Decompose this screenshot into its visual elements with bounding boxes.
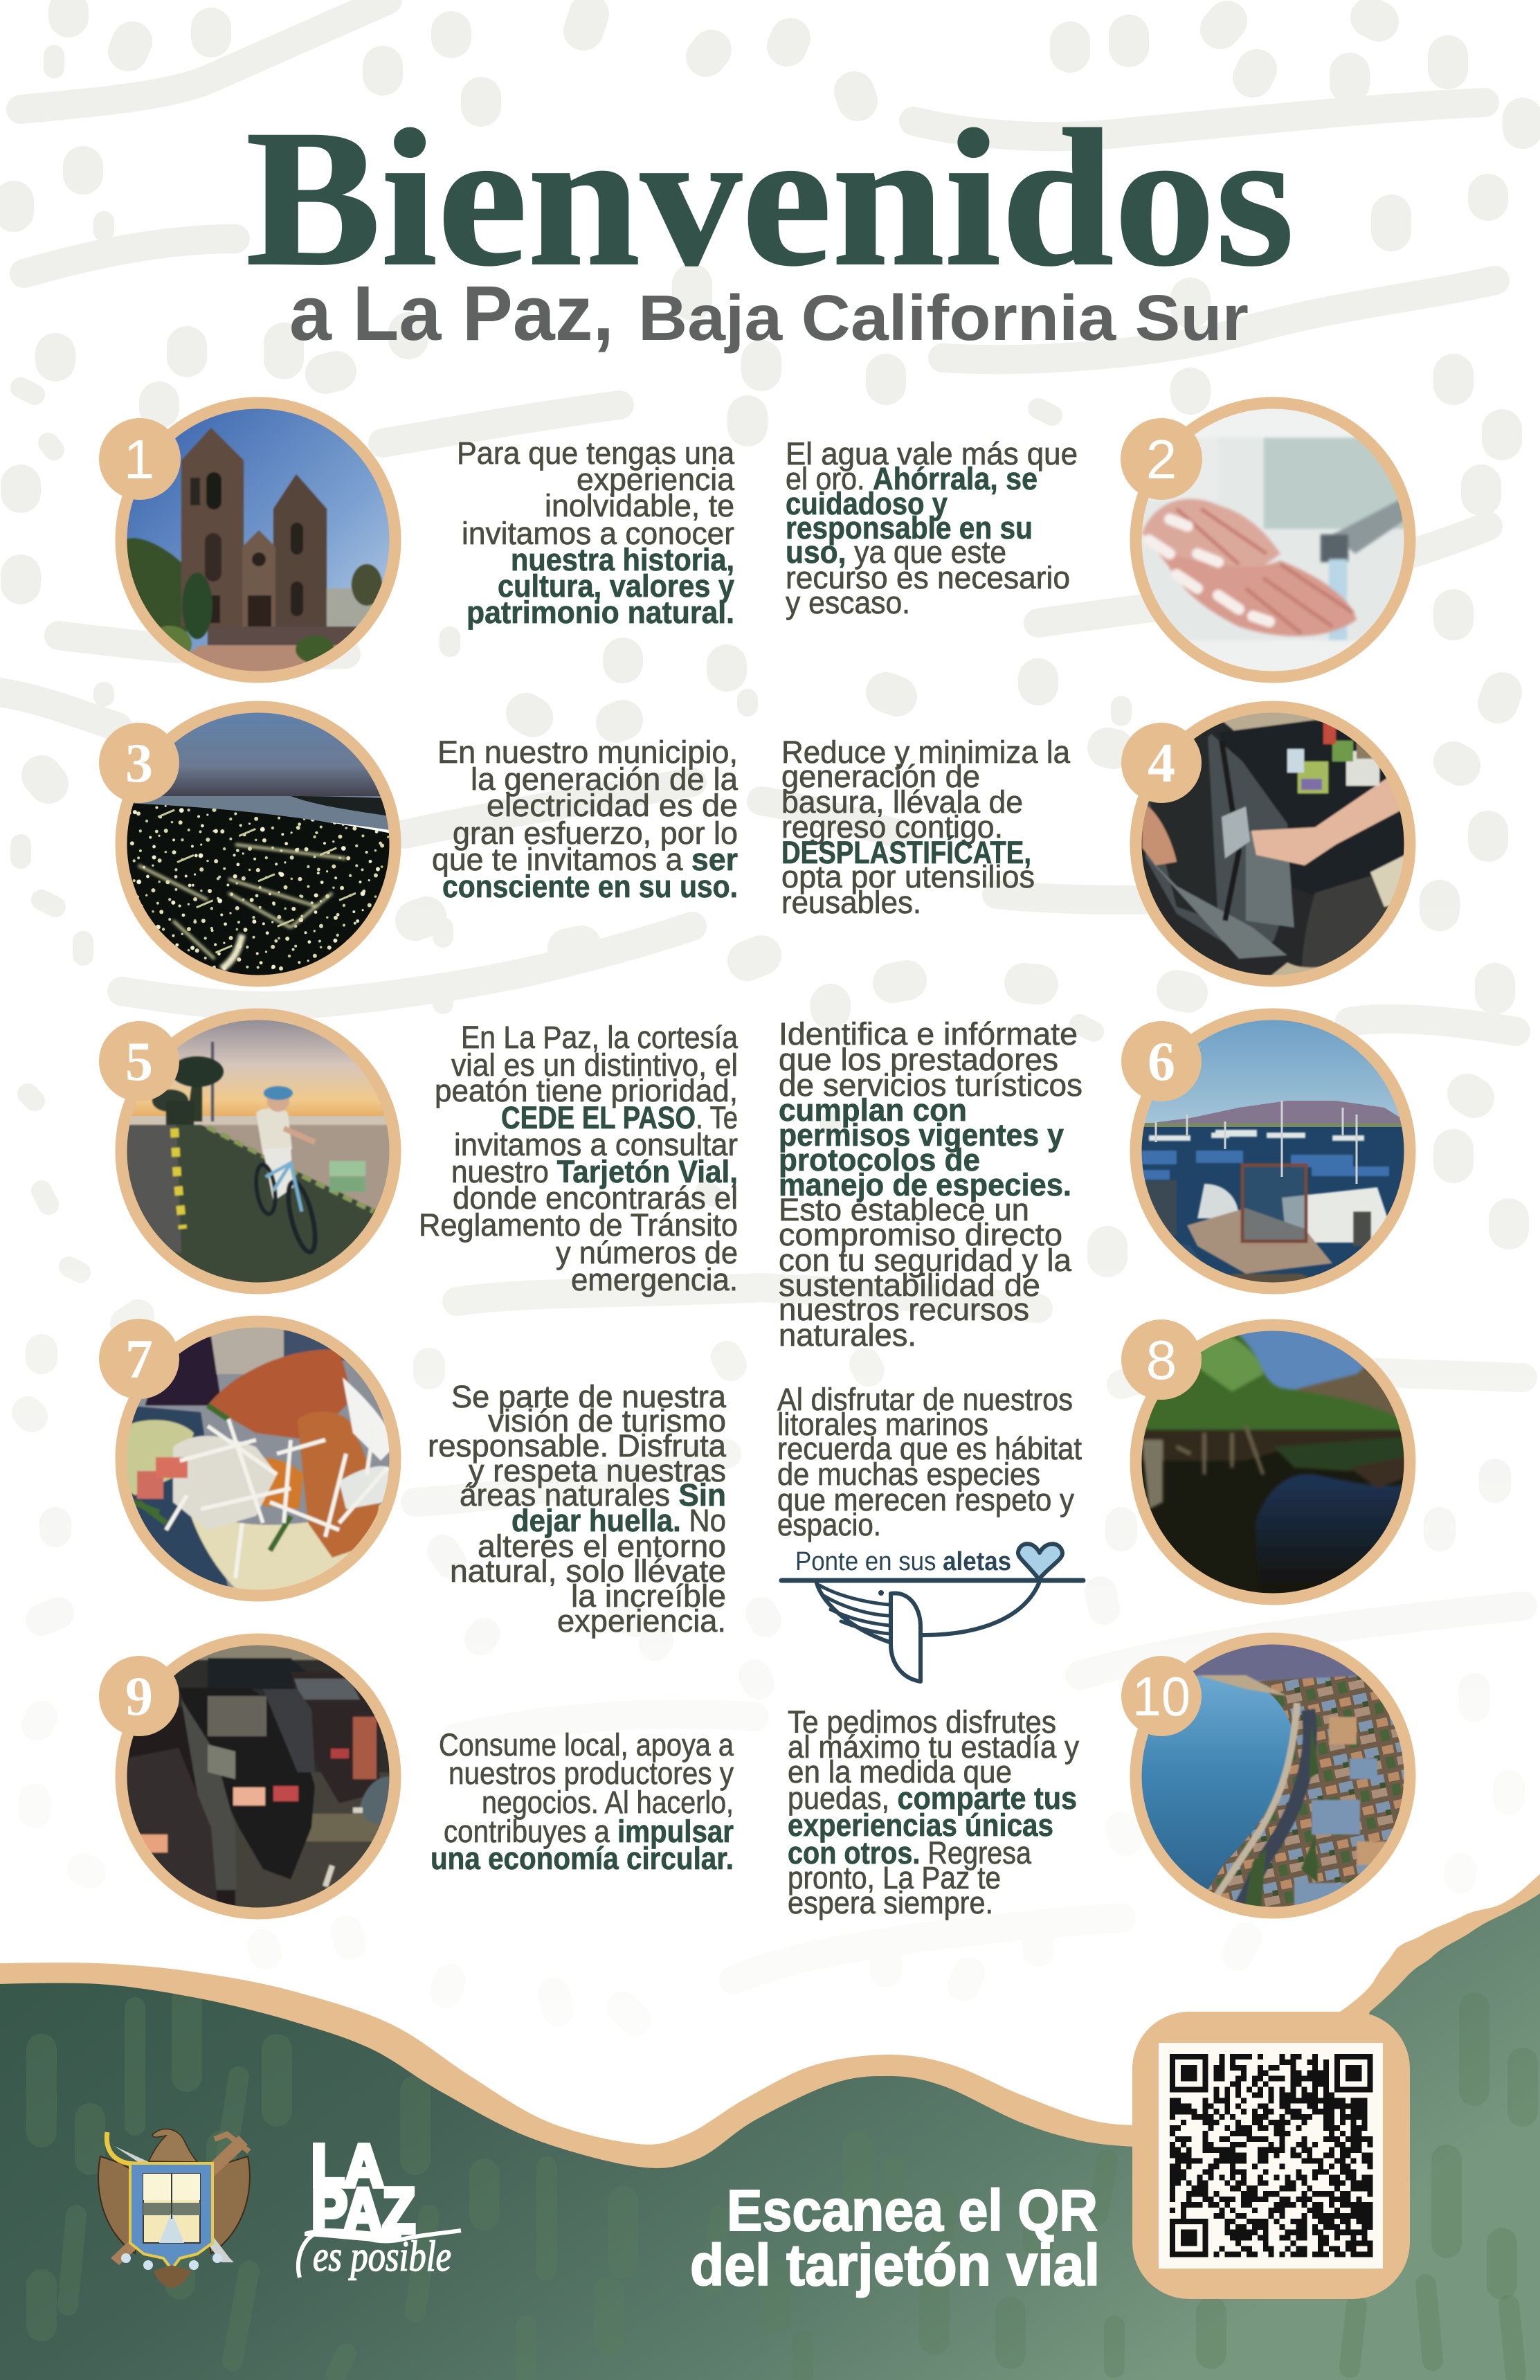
text block 2: recurso es necesario xyxy=(786,560,1070,595)
text block 8: Al disfrutar de nuestros xyxy=(777,1382,1073,1417)
text block 6: Identifica e infórmate xyxy=(779,1016,1078,1052)
text block 1 xyxy=(457,435,735,630)
badge 7: 7 xyxy=(125,1329,153,1390)
ring 5 xyxy=(121,1014,395,1288)
text block 9: una economía circular. xyxy=(431,1841,734,1876)
text block 6: manejo de especies. xyxy=(779,1167,1071,1202)
badge 3 xyxy=(99,723,179,803)
text block 1: cultura, valores y xyxy=(498,568,734,604)
text block 9 xyxy=(431,1727,734,1876)
logo: Ponte en sus aletas whale: Ponte en sus aletas xyxy=(795,1547,1011,1576)
text block 7: visión de turismo xyxy=(488,1403,726,1439)
text block 4: basura, llévala de xyxy=(781,784,1023,820)
text block 1: Para que tengas una xyxy=(457,435,735,471)
badge 8 xyxy=(1121,1319,1202,1400)
text block 6 xyxy=(779,1016,1082,1353)
text block 10: pronto, La Paz te xyxy=(788,1860,1001,1895)
photo 5: cyclist on the malecon xyxy=(125,1018,395,1288)
text block 10 xyxy=(788,1704,1079,1920)
text block 5: emergencia. xyxy=(571,1262,738,1297)
logo: La Paz es posible: LA xyxy=(311,2133,383,2199)
text block 10: espera siempre. xyxy=(788,1885,993,1920)
ring 10 xyxy=(1136,1639,1410,1913)
badge 1: 1 xyxy=(124,429,154,490)
ring 4 xyxy=(1136,707,1410,981)
text block 6: nuestros recursos xyxy=(779,1292,1029,1327)
text block 7: experiencia. xyxy=(557,1603,726,1639)
text block 8: recuerda que es hábitat xyxy=(777,1431,1082,1466)
text block 7: y respeta nuestras xyxy=(469,1453,726,1488)
title: Bienvenidos xyxy=(246,90,1294,307)
text block 1: inolvidable, te xyxy=(545,488,734,523)
text block 10: con otros. Regresa xyxy=(788,1835,1032,1870)
subtitle: a La Paz, xyxy=(289,270,614,357)
badge 4 xyxy=(1121,723,1202,803)
text block 6: de servicios turísticos xyxy=(779,1067,1082,1103)
text block 4 xyxy=(781,734,1071,920)
text block 10: puedas, comparte tus xyxy=(788,1781,1077,1816)
text block 4: DESPLASTIFÍCATE, xyxy=(781,835,1031,870)
text block 6: protocolos de xyxy=(779,1142,980,1178)
text block 8: de muchas especies xyxy=(777,1457,1040,1492)
text block 1: invitamos a conocer xyxy=(462,516,734,551)
text block 7 xyxy=(428,1379,727,1639)
text block 4: generación de xyxy=(781,759,980,794)
text block 1: patrimonio natural. xyxy=(466,595,734,630)
text block 4: Reduce y minimiza la xyxy=(781,734,1071,770)
text block 6: permisos vigentes y xyxy=(779,1117,1064,1153)
text block 10: en la medida que xyxy=(788,1754,1012,1789)
text block 10: al máximo tu estadía y xyxy=(788,1729,1079,1765)
footer call to action: Escanea el QR xyxy=(727,2178,1098,2243)
badge 1 xyxy=(99,418,181,500)
badge 6: 6 xyxy=(1148,1031,1175,1092)
subtitle: Baja California Sur xyxy=(638,282,1249,354)
badge 8: 8 xyxy=(1146,1329,1177,1391)
text block 1: nuestra historia, xyxy=(511,542,734,577)
text block 2: El agua vale más que xyxy=(786,436,1078,471)
logo: La Paz es posible xyxy=(298,2133,461,2280)
text block 5: peatón tiene prioridad, xyxy=(435,1073,738,1108)
text block 6: compromiso directo xyxy=(779,1217,1062,1252)
QR card xyxy=(1132,2012,1410,2299)
logo: Ponte en sus aletas whale xyxy=(781,1544,1083,1682)
text block 5 xyxy=(419,1020,739,1297)
text block 3: electricidad es de xyxy=(487,788,738,823)
text block 1: experiencia xyxy=(577,462,735,497)
badge 5 xyxy=(99,1021,179,1101)
text block 2: uso, ya que este xyxy=(786,534,1006,570)
ring 7 xyxy=(121,1322,395,1596)
ring 9 xyxy=(121,1639,395,1913)
text block 6: con tu seguridad y la xyxy=(779,1243,1072,1278)
text block 6: que los prestadores xyxy=(779,1042,1058,1077)
badge 2 xyxy=(1121,418,1202,500)
text block 5: CEDE EL PASO. Te xyxy=(501,1100,738,1135)
text block 5: invitamos a consultar xyxy=(454,1127,738,1162)
text block 5: y números de xyxy=(556,1235,738,1270)
text block 7: la increíble xyxy=(571,1578,726,1614)
text block 3: que te invitamos a ser xyxy=(432,842,738,877)
badge 5: 5 xyxy=(125,1031,153,1092)
ring 6 xyxy=(1136,1014,1410,1288)
text block 2: responsable en su xyxy=(786,510,1033,546)
text block 2: el oro. Ahórrala, se xyxy=(786,461,1038,496)
logo: La Paz es posible: es posible xyxy=(313,2233,451,2280)
ring 2 xyxy=(1136,403,1410,677)
text block 3: En nuestro municipio, xyxy=(437,734,738,770)
logo: coat of arms xyxy=(98,2129,250,2288)
photo 7: fish taco xyxy=(125,1326,395,1592)
ring 1 xyxy=(121,403,395,677)
text block 3: la generación de la xyxy=(471,761,739,797)
text block 8: espacio. xyxy=(777,1507,881,1542)
text block 6: naturales. xyxy=(779,1317,916,1353)
ring 3 xyxy=(121,707,395,981)
badge 4: 4 xyxy=(1148,733,1175,794)
text block 4: opta por utensilios xyxy=(781,859,1035,894)
text block 9: contribuyes a impulsar xyxy=(444,1814,734,1849)
text block 10: Te pedimos disfrutes xyxy=(788,1704,1056,1740)
footer call to action: del tarjetón vial xyxy=(690,2233,1100,2298)
badge 6 xyxy=(1121,1021,1202,1101)
badge 7 xyxy=(99,1319,179,1399)
photo 4: trash bag on the beach xyxy=(1142,713,1404,975)
badge 2: 2 xyxy=(1146,429,1177,490)
QR code xyxy=(1159,2043,1383,2269)
photo 6: marina xyxy=(1135,1018,1412,1290)
footer pattern xyxy=(42,2001,1523,2374)
text block 5: donde encontrarás el xyxy=(453,1180,738,1216)
text block 3 xyxy=(432,734,739,904)
text block 7: Se parte de nuestra xyxy=(451,1379,727,1414)
text block 8: que merecen respeto y xyxy=(777,1482,1074,1517)
footer call to action xyxy=(690,2178,1100,2298)
text block 9: Consume local, apoya a xyxy=(439,1727,734,1763)
text block 2: cuidadoso y xyxy=(786,486,948,521)
text block 2 xyxy=(786,436,1078,620)
text block 4: regreso contigo. xyxy=(781,809,1003,845)
subtitle xyxy=(289,270,1249,357)
text block 4: reusables. xyxy=(781,885,921,920)
text block 7: responsable. Disfruta xyxy=(428,1428,727,1463)
photo 1: cathedral xyxy=(125,408,395,671)
text block 9: negocios. Al hacerlo, xyxy=(482,1785,734,1820)
text block 7: dejar huella. No xyxy=(511,1503,726,1538)
text block 5: vial es un distintivo, el xyxy=(451,1047,738,1083)
badge 10 xyxy=(1121,1656,1202,1736)
text block 7: natural, solo llévate xyxy=(450,1553,726,1589)
text block 8 xyxy=(777,1382,1082,1542)
text block 6: sustentabilidad de xyxy=(779,1268,1040,1303)
badge 10: 10 xyxy=(1132,1666,1190,1727)
badge 9: 9 xyxy=(125,1666,153,1727)
photo 10: aerial coast xyxy=(1142,1645,1404,1906)
logo: La Paz es posible: PAZ xyxy=(311,2176,415,2246)
text block 6: cumplan con xyxy=(779,1092,967,1128)
photo 2: washing hands xyxy=(1135,408,1416,671)
footer green panel xyxy=(0,1893,1540,2380)
photo 9: traffic xyxy=(125,1641,395,1911)
text block 7: alteres el entorno xyxy=(478,1529,726,1564)
text block 2: y escaso. xyxy=(786,585,910,620)
pattern fade xyxy=(0,761,1540,2077)
footer wave: tan border xyxy=(0,1874,1540,2380)
badge 3: 3 xyxy=(125,733,153,794)
text block 6: Esto establece un xyxy=(779,1192,1029,1227)
text block 8: litorales marinos xyxy=(777,1407,988,1442)
badge 9 xyxy=(99,1656,179,1736)
text block 5: Reglamento de Tránsito xyxy=(419,1207,738,1243)
text block 5: nuestro Tarjetón Vial, xyxy=(451,1154,738,1189)
text block 3: consciente en su uso. xyxy=(442,869,738,904)
ring 8 xyxy=(1136,1325,1410,1599)
text block 5: En La Paz, la cortesía xyxy=(461,1020,739,1055)
photo 3: city at night xyxy=(125,710,395,983)
photo 8: mangrove xyxy=(1135,1329,1412,1599)
text block 9: nuestros productores y xyxy=(449,1756,734,1791)
text block 10: experiencias únicas xyxy=(788,1807,1053,1843)
text block 7: áreas naturales Sin xyxy=(460,1477,726,1513)
text block 3: gran esfuerzo, por lo xyxy=(453,815,738,851)
